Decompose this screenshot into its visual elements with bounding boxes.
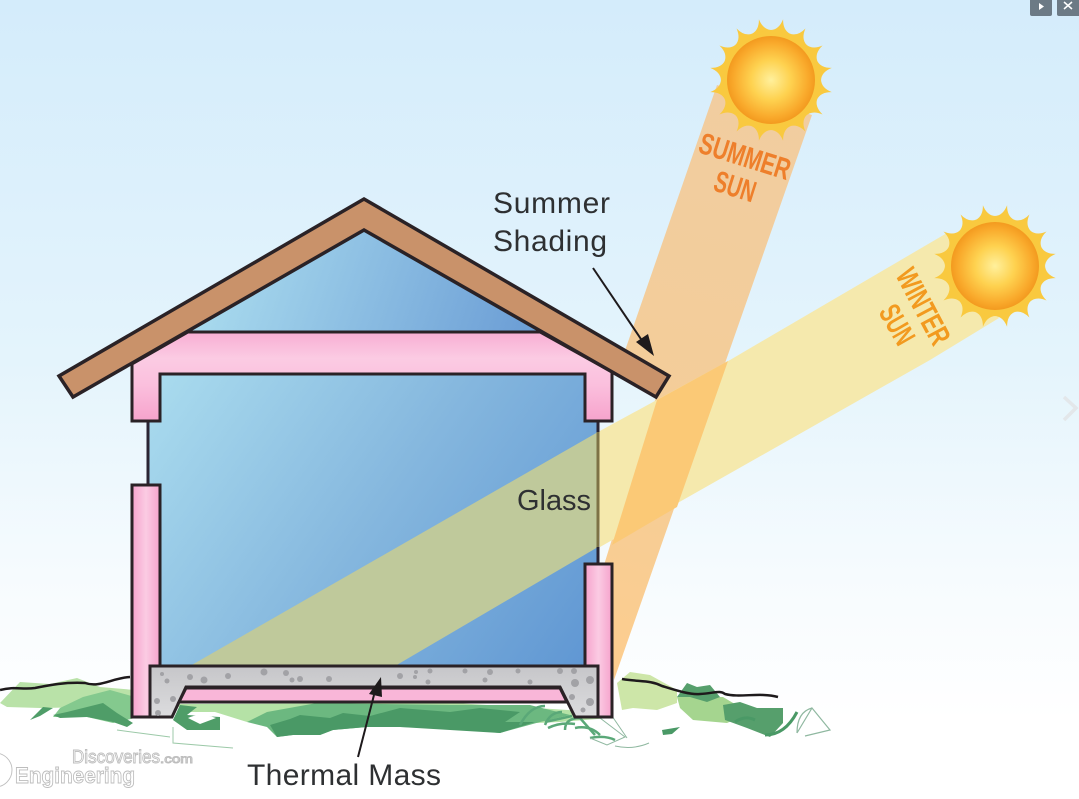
concrete aggregate (154, 668, 594, 716)
right wall insulation (585, 564, 612, 717)
watermark: .com (160, 752, 193, 766)
attic glass area (188, 230, 540, 332)
glass wall line (596, 421, 600, 564)
concrete slab (150, 666, 598, 717)
next chevron (1064, 397, 1076, 420)
center grass (172, 703, 649, 748)
right grass (617, 672, 830, 737)
winter sun label: SUN (872, 299, 921, 351)
viewer button: close (1057, 0, 1079, 16)
beam overlap (612, 361, 728, 545)
label: summer shading: Shading (493, 225, 607, 258)
summer sun label: SUN (710, 165, 760, 209)
summer sun (708, 17, 834, 143)
watermark (0, 747, 193, 788)
left grass (0, 678, 170, 737)
arrow: thermal mass (358, 677, 382, 757)
grass (0, 672, 830, 748)
label: thermal mass: Thermal Mass (247, 759, 441, 792)
arrow: summer shading (593, 268, 654, 356)
winter sun (932, 203, 1058, 329)
summer sun beam (604, 85, 812, 680)
ground line left (0, 677, 130, 690)
left wall insulation (132, 485, 160, 717)
watermark: Discoveries (72, 747, 160, 767)
viewer button: play (1030, 0, 1052, 16)
summer sun label (695, 127, 795, 209)
winter sun label (872, 263, 957, 351)
label: summer shading: Summer (493, 187, 610, 220)
ceiling insulation (132, 332, 612, 421)
tinted glass line (596, 432, 600, 547)
winter sun label: WINTER (889, 263, 957, 351)
winter sun beam (598, 233, 999, 547)
ground line right (622, 679, 778, 697)
under-slab insulation (179, 688, 567, 702)
winter beam inside house (190, 432, 598, 666)
label: glass: Glass (517, 485, 591, 517)
label: summer shading (493, 187, 610, 258)
roof (59, 199, 669, 397)
left window line (146, 421, 150, 485)
watermark: Engineering (15, 763, 135, 788)
interior glass area (148, 374, 598, 666)
summer sun label: SUMMER (695, 127, 795, 187)
house (59, 199, 669, 717)
